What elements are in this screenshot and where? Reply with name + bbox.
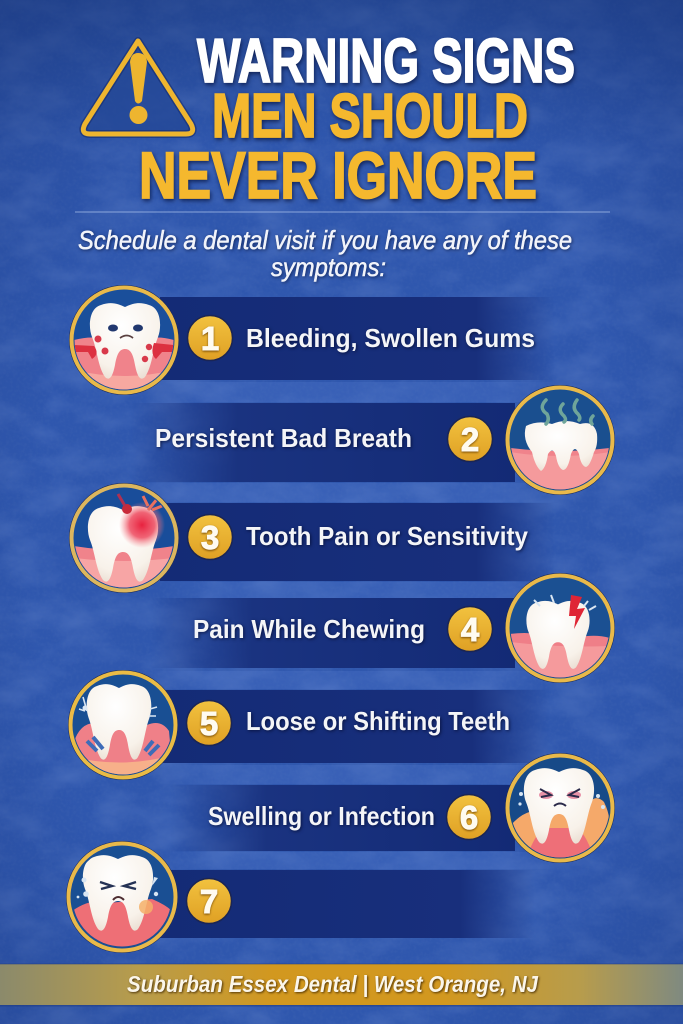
row 4: chewing pain [150, 573, 615, 683]
number badge 4 [448, 606, 492, 652]
icon: cracked tooth [505, 573, 615, 683]
icon: loose tooth [68, 670, 178, 780]
title: MEN SHOULD [212, 82, 528, 151]
number badge 4: 4 [461, 611, 480, 648]
row 1: bleeding gums [69, 285, 555, 395]
number badge 6 [446, 794, 492, 840]
row 2: bad breath [130, 385, 615, 495]
number badge 5: 5 [200, 705, 218, 742]
label 3: Tooth Pain or Sensitivity [246, 521, 528, 551]
icon: bleeding tooth [69, 285, 179, 395]
icon: tooth pain [69, 483, 179, 593]
title: NEVER IGNORE [139, 138, 537, 212]
number badge 2 [448, 416, 492, 462]
number badge 1 [188, 316, 232, 360]
row 5: loose teeth [68, 670, 550, 780]
subtitle [78, 225, 572, 282]
title [139, 27, 575, 212]
number badge 5 [186, 700, 232, 746]
icon: grimacing tooth [66, 841, 178, 953]
number badge 1: 1 [201, 320, 219, 357]
footer band [0, 964, 683, 1006]
row 3: tooth pain [69, 483, 555, 593]
footer text: Suburban Essex Dental | West Orange, NJ [127, 971, 539, 997]
number badge 6: 6 [460, 799, 478, 836]
row 7: blank label [66, 841, 535, 953]
number badge 2: 2 [461, 421, 479, 458]
number badge 7: 7 [200, 883, 218, 920]
label 6: Swelling or Infection [208, 801, 435, 831]
number badge 3: 3 [201, 519, 219, 556]
subtitle: Schedule a dental visit if you have any of these [78, 225, 572, 255]
label 5: Loose or Shifting Teeth [246, 706, 510, 736]
icon: swollen tooth [505, 753, 615, 863]
number badge 3 [188, 514, 232, 560]
label 1: Bleeding, Swollen Gums [246, 323, 535, 353]
row 6: swelling [170, 753, 615, 863]
label 4: Pain While Chewing [193, 614, 425, 644]
number badge 7 [186, 878, 232, 924]
label 2: Persistent Bad Breath [155, 423, 412, 453]
icon: bad breath teeth [505, 385, 615, 495]
icon: warning triangle [83, 41, 193, 134]
subtitle: symptoms: [271, 252, 386, 282]
